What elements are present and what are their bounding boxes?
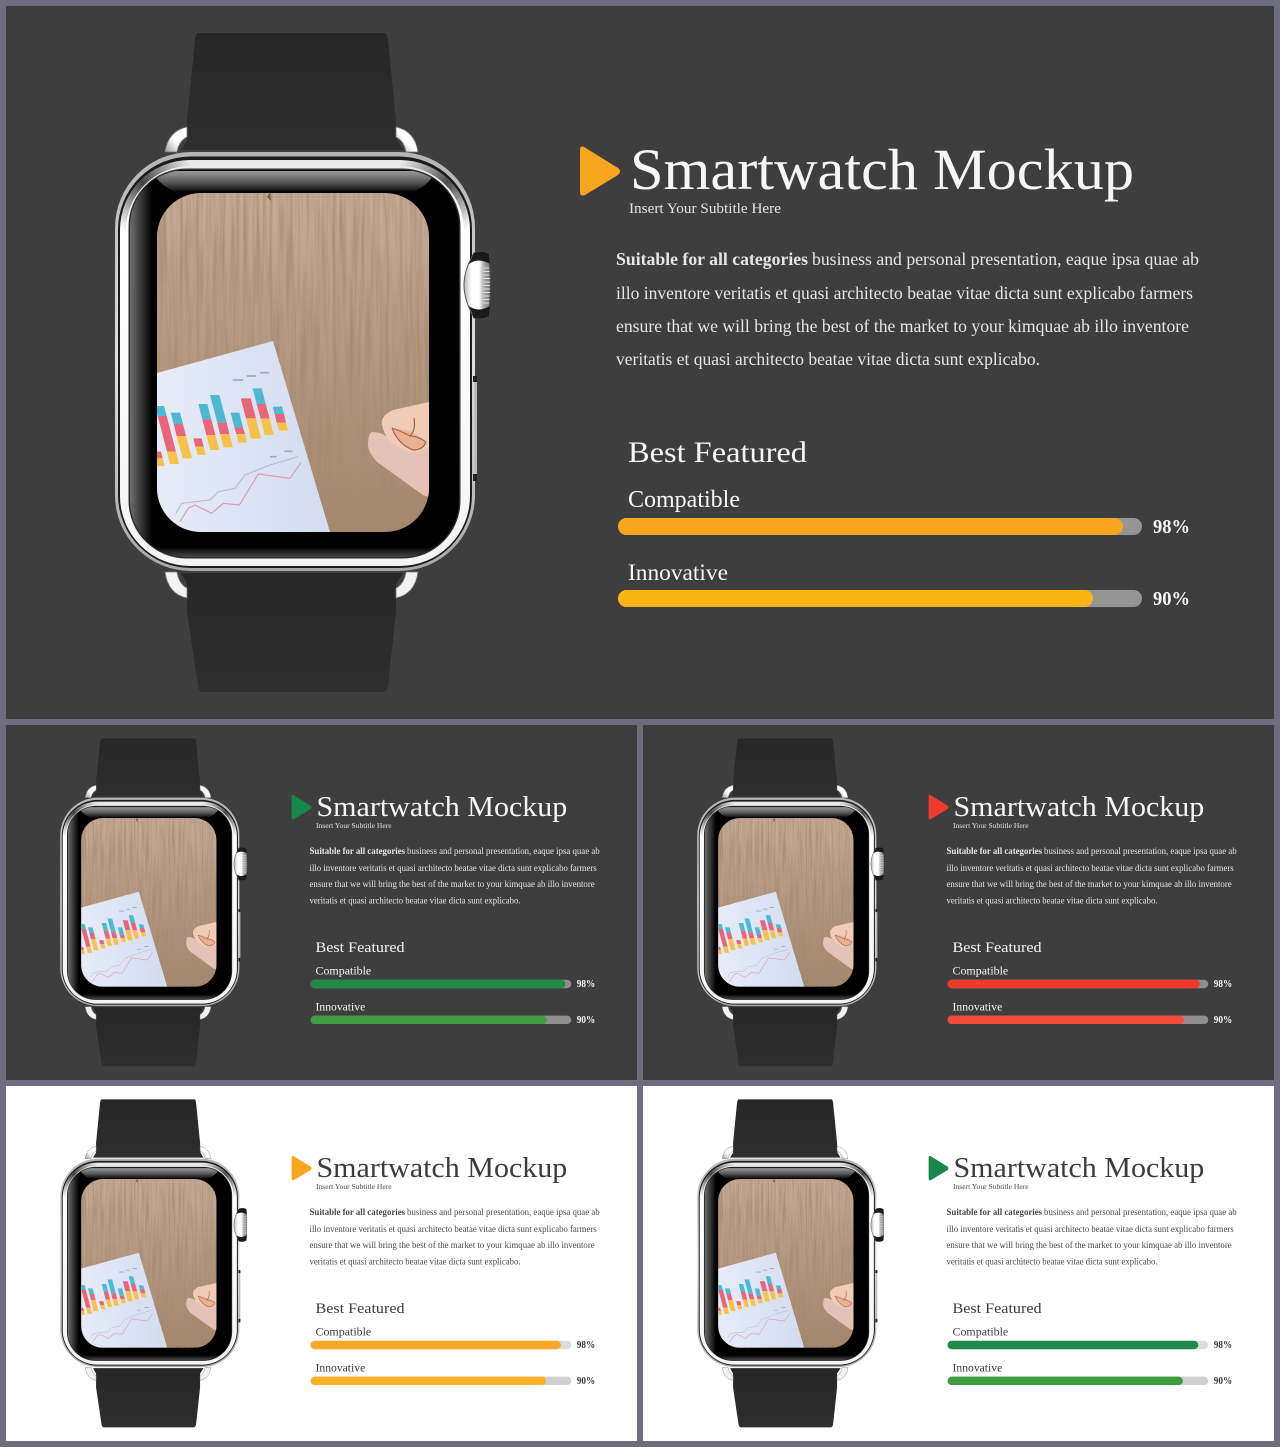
icon: green play triangle xyxy=(292,795,312,819)
text block: description: veritatis et quasi architecto beatae vitae dicta sunt explicabo. xyxy=(947,896,1158,906)
text block: description: veritatis et quasi architecto beatae vitae dicta sunt explicabo. xyxy=(947,1257,1158,1267)
title: Smartwatch Mockup xyxy=(317,1152,567,1184)
text block: description: Suitable for all categories xyxy=(310,846,406,856)
panel: small dark red slide xyxy=(643,725,1274,1080)
text block: description: business and personal presentation, eaque ipsa quae ab xyxy=(407,1207,600,1217)
progress bar: compatible 98% xyxy=(948,980,1208,988)
text block: description: illo inventore veritatis et quasi architecto beatae vitae dicta sunt explicabo farmers xyxy=(616,283,1193,303)
progress bar: innovative 90% xyxy=(311,1377,571,1385)
text block: description: Suitable for all categories xyxy=(310,1207,406,1217)
panel: small white orange slide xyxy=(6,1086,637,1441)
heading: best featured: Best Featured xyxy=(316,940,405,956)
title: Smartwatch Mockup xyxy=(630,137,1134,202)
text block: description: business and personal presentation, eaque ipsa quae ab xyxy=(812,249,1199,269)
value: 98%: 98% xyxy=(1153,516,1190,538)
label: compatible: Compatible xyxy=(953,963,1008,977)
icon: smartwatch xyxy=(60,1099,247,1427)
progress bar: innovative 90% xyxy=(948,1377,1208,1385)
title: Smartwatch Mockup xyxy=(954,791,1204,823)
label: innovative: Innovative xyxy=(953,1362,1002,1375)
progress bar: innovative 90% xyxy=(311,1016,571,1024)
label: innovative: Innovative xyxy=(316,1362,365,1375)
progress bar: compatible 98% xyxy=(311,980,571,988)
heading: best featured: Best Featured xyxy=(628,436,807,469)
label: compatible: Compatible xyxy=(953,1324,1008,1338)
heading: best featured: Best Featured xyxy=(953,1301,1042,1317)
text block: description: illo inventore veritatis et quasi architecto beatae vitae dicta sunt explicabo farmers xyxy=(947,863,1234,873)
icon: smartwatch xyxy=(697,1099,884,1427)
value: 98%: 98% xyxy=(577,979,595,990)
text block: description: ensure that we will bring the best of the market to your kimquae ab illo inventore xyxy=(947,1240,1232,1250)
progress bar: compatible 98% xyxy=(948,1341,1208,1349)
text block: description xyxy=(310,1207,600,1267)
label: innovative: Innovative xyxy=(953,1001,1002,1014)
panel: large dark orange slide xyxy=(6,6,1274,719)
progress bar: compatible 98% xyxy=(311,1341,571,1349)
subtitle: Insert Your Subtitle Here xyxy=(316,821,392,830)
label: innovative: Innovative xyxy=(316,1001,365,1014)
text block: description: business and personal presentation, eaque ipsa quae ab xyxy=(1044,1207,1237,1217)
icon: red play triangle xyxy=(929,795,949,819)
progress bar: innovative 90% xyxy=(948,1016,1208,1024)
text block: description: illo inventore veritatis et quasi architecto beatae vitae dicta sunt explicabo farmers xyxy=(947,1224,1234,1234)
text block: description: veritatis et quasi architecto beatae vitae dicta sunt explicabo. xyxy=(310,896,521,906)
progress bar: innovative 90% xyxy=(618,590,1142,607)
subtitle: Insert Your Subtitle Here xyxy=(953,1182,1029,1191)
icon: green play triangle xyxy=(929,1156,949,1180)
label: compatible: Compatible xyxy=(316,1324,371,1338)
subtitle: Insert Your Subtitle Here xyxy=(629,201,781,217)
subtitle: Insert Your Subtitle Here xyxy=(316,1182,392,1191)
icon: orange play triangle xyxy=(580,146,620,196)
icon: smartwatch xyxy=(60,738,247,1066)
text block: description: illo inventore veritatis et quasi architecto beatae vitae dicta sunt explicabo farmers xyxy=(310,863,597,873)
text block: description xyxy=(947,1207,1237,1267)
text block: description xyxy=(616,249,1199,369)
progress bar: compatible 98% xyxy=(618,518,1142,535)
heading: best featured: Best Featured xyxy=(316,1301,405,1317)
text block: description: Suitable for all categories xyxy=(947,846,1043,856)
text block: description: Suitable for all categories xyxy=(616,249,808,269)
text block: description xyxy=(310,846,600,906)
panel: small dark green slide xyxy=(6,725,637,1080)
text block: description xyxy=(947,846,1237,906)
label: innovative: Innovative xyxy=(628,560,728,586)
text block: description: ensure that we will bring the best of the market to your kimquae ab illo inventore xyxy=(947,879,1232,889)
value: 98%: 98% xyxy=(1214,1340,1232,1351)
value: 98%: 98% xyxy=(1214,979,1232,990)
title: Smartwatch Mockup xyxy=(317,791,567,823)
value: 90%: 90% xyxy=(1214,1015,1232,1026)
value: 90%: 90% xyxy=(577,1376,595,1387)
text block: description: veritatis et quasi architecto beatae vitae dicta sunt explicabo. xyxy=(310,1257,521,1267)
label: compatible: Compatible xyxy=(316,963,371,977)
text block: description: ensure that we will bring the best of the market to your kimquae ab illo inventore xyxy=(310,1240,595,1250)
panel: small white green slide xyxy=(643,1086,1274,1441)
icon: orange play triangle xyxy=(292,1156,312,1180)
label: compatible: Compatible xyxy=(628,487,740,513)
text block: description: veritatis et quasi architecto beatae vitae dicta sunt explicabo. xyxy=(616,349,1040,369)
text block: description: ensure that we will bring the best of the market to your kimquae ab illo inventore xyxy=(310,879,595,889)
value: 98%: 98% xyxy=(577,1340,595,1351)
text block: description: illo inventore veritatis et quasi architecto beatae vitae dicta sunt explicabo farmers xyxy=(310,1224,597,1234)
icon: smartwatch xyxy=(697,738,884,1066)
title: Smartwatch Mockup xyxy=(954,1152,1204,1184)
text block: description: business and personal presentation, eaque ipsa quae ab xyxy=(407,846,600,856)
icon: smartwatch xyxy=(115,33,490,692)
text block: description: ensure that we will bring the best of the market to your kimquae ab illo inventore xyxy=(616,316,1189,336)
text block: description: business and personal presentation, eaque ipsa quae ab xyxy=(1044,846,1237,856)
value: 90%: 90% xyxy=(1214,1376,1232,1387)
subtitle: Insert Your Subtitle Here xyxy=(953,821,1029,830)
text block: description: Suitable for all categories xyxy=(947,1207,1043,1217)
value: 90%: 90% xyxy=(1153,588,1190,610)
value: 90%: 90% xyxy=(577,1015,595,1026)
heading: best featured: Best Featured xyxy=(953,940,1042,956)
